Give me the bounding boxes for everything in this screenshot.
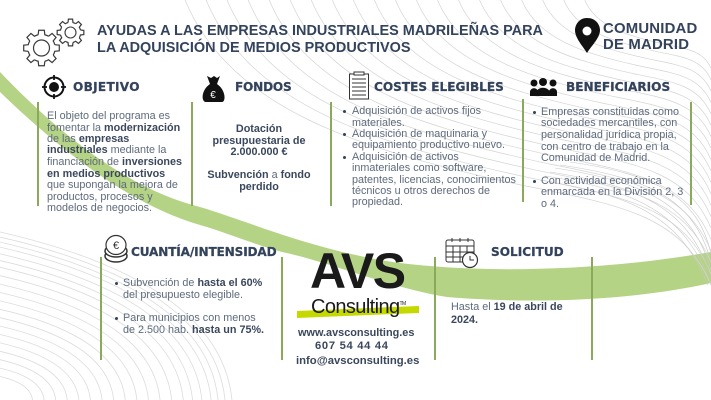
text: costes elegibles: inmateriales como software, [352,162,486,174]
text: costes elegibles: técnicos u otros derechos de [352,185,490,197]
text: objetivo: El objeto del programa es [47,110,170,122]
text: cuantía: Subvención de hasta el 60% [123,277,262,289]
text: beneficiarios: o 4. [541,198,559,210]
region label: DE MADRID [603,37,689,53]
contact details: 607 54 44 44 [315,340,389,352]
icon: gears [24,19,84,66]
text: objetivo: productos, procesos y [47,191,153,203]
text: cuantía [115,277,264,336]
text: objetivo: que supongan la mejora de [47,179,178,191]
heading: costes elegibles: COSTES ELEGIBLES [374,80,504,94]
region label: COMUNIDAD [603,21,697,37]
icon: calendar [446,238,478,268]
text: beneficiarios: enmarcada en la División 2, 3 [541,186,683,198]
icon: people [530,78,557,96]
icon: money bag: € [210,90,216,101]
contact details: info@avsconsulting.es [296,355,419,367]
region label [603,21,697,53]
text: beneficiarios: Con actividad económica [541,175,662,187]
logo: AVS Consulting: AVS [310,243,405,299]
text: costes elegibles: equipamiento productivo nuevo. [352,139,505,151]
heading: cuantía/intensidad: CUANTÍA/INTENSIDAD [131,245,277,259]
logo highlight [297,306,419,318]
contact details [296,327,419,367]
text: objetivo [47,110,182,214]
text: objetivo: financiación de inversiones [47,156,182,168]
text: costes elegibles: patentes, licencias, conocimientos [352,174,516,186]
icon: money bag [203,76,225,102]
logo: AVS Consulting: ConsultingTM [311,296,406,318]
text: beneficiarios: Comunidad de Madrid. [541,152,650,164]
text: cuantía: del presupuesto elegible. [123,289,243,301]
text: costes elegibles: Adquisición de activos [352,151,459,163]
text: beneficiarios: sociedades mercantiles, con [541,117,677,129]
text: objetivo: modelos de negocios. [47,202,152,214]
text: cuantía: Para municipios con menos [123,312,256,324]
text: costes elegibles: propiedad. [352,196,403,208]
text: fondos [207,123,311,193]
title: LA ADQUISICIÓN DE MEDIOS PRODUCTIVOS [97,39,411,56]
text: objetivo: fomentar la modernización [47,122,180,134]
heading: objetivo: OBJETIVO [73,80,140,94]
text: costes elegibles: Adquisición de activos fijos [352,105,481,117]
text: cuantía: de 2.500 hab. hasta un 75%. [123,324,264,336]
heading: fondos: FONDOS [235,80,292,94]
text: objetivo: industriales mediante la [47,144,166,156]
text: beneficiarios: personalidad jurídica propia, [541,129,677,141]
text: beneficiarios: con centro de trabajo en la [541,141,669,153]
text: fondos: 2.000.000 € [230,146,288,158]
icon: coins [105,236,127,262]
text: solicitud [451,301,563,326]
icon: clipboard [350,72,368,99]
heading: solicitud: SOLICITUD [491,245,564,259]
text: beneficiarios [533,106,683,210]
text: solicitud: Hasta el 19 de abril de [451,301,563,313]
text: objetivo: de las empresas [47,133,129,145]
text: fondos: Subvención a fondo [207,169,311,181]
heading: beneficiarios: BENEFICIARIOS [566,80,670,94]
text: objetivo: en medios productivos [47,168,165,180]
text: fondos: presupuestaria de [212,135,306,147]
icon: coins: € [113,240,119,252]
icon: location pin [575,18,600,53]
text: fondos: Dotación [236,123,282,135]
contact details: www.avsconsulting.es [298,327,414,339]
text: costes elegibles: materiales. [352,117,405,129]
text: costes elegibles [343,105,516,208]
icon: target [42,75,66,99]
title [97,22,543,56]
text: costes elegibles: Adquisición de maquinaria y [352,128,487,140]
text: solicitud: 2024. [451,314,478,326]
text: beneficiarios: Empresas constituidas como [541,106,679,118]
text: fondos: perdido [239,181,279,193]
title: AYUDAS A LAS EMPRESAS INDUSTRIALES MADRILEÑAS PARA [97,22,543,39]
